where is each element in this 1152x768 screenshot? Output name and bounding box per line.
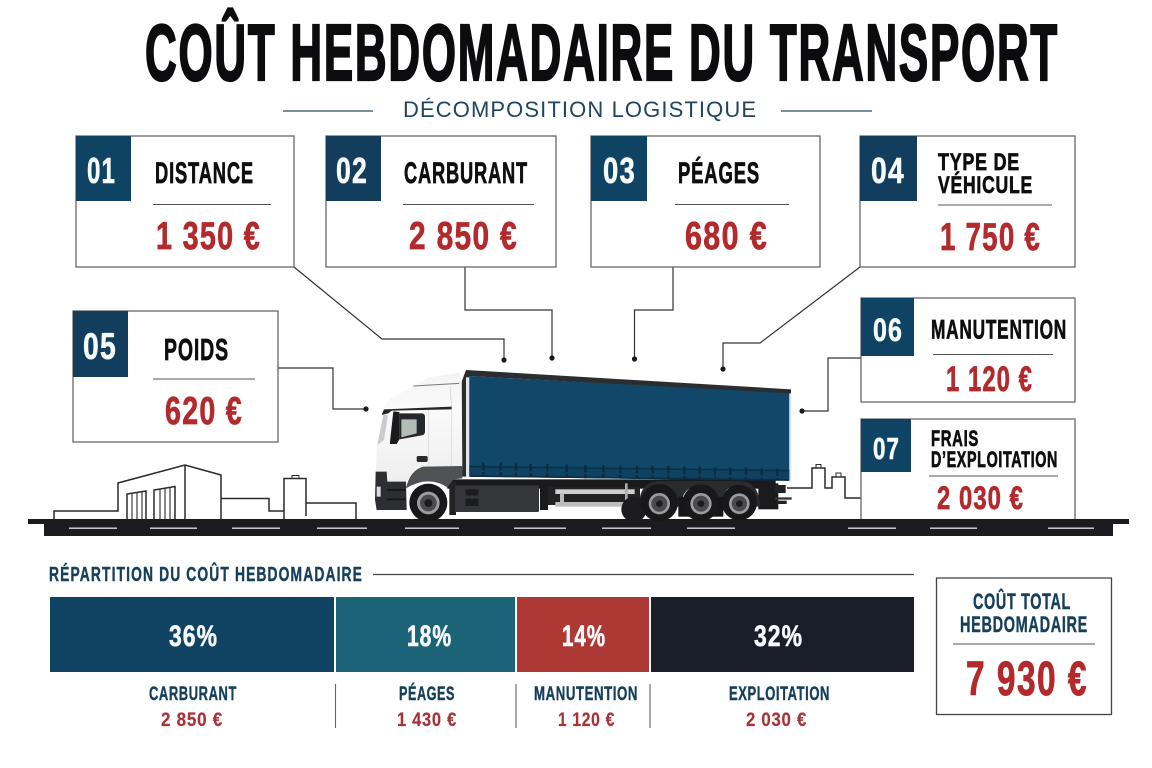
truck cab [375, 373, 462, 510]
card 07 frais d'exploitation [861, 419, 1075, 519]
card 03 peages: 03 [603, 150, 636, 191]
segment exploitation 32%: 32% [754, 620, 803, 653]
label carburant: 2 850 € [161, 710, 223, 731]
truck [375, 370, 792, 522]
label manutention: 1 120 € [558, 710, 615, 731]
bar labels [149, 683, 830, 731]
card 05 poids: POIDS [164, 332, 229, 367]
card 06 manutention: 1 120 € [946, 360, 1033, 399]
skyline right [787, 464, 861, 498]
subtitle: DÉCOMPOSITION LOGISTIQUE [403, 97, 756, 122]
card 05 poids [73, 311, 278, 442]
card 07 frais d'exploitation: 2 030 € [937, 480, 1024, 516]
card 02 carburant: 02 [336, 150, 368, 191]
card 05 poids: 05 [83, 326, 117, 367]
card 05 poids: 620 € [165, 390, 243, 433]
card 04 type de vehicule: 04 [871, 150, 905, 191]
label exploitation [729, 684, 830, 731]
skyline left [54, 465, 356, 519]
truck wheels [409, 481, 760, 522]
total cost box: 7 930 € [966, 653, 1088, 706]
road [28, 519, 1129, 536]
label exploitation: 2 030 € [746, 710, 807, 731]
card 07 frais d'exploitation: D’EXPLOITATION [931, 447, 1058, 472]
card 01 distance: DISTANCE [155, 157, 254, 190]
card 04 type de vehicule: 1 750 € [940, 216, 1041, 259]
card 04 type de vehicule [860, 136, 1075, 267]
label peages: 1 430 € [397, 710, 457, 731]
stacked bar [50, 597, 914, 672]
total cost box [936, 578, 1112, 714]
total cost box: HEBDOMADAIRE [960, 612, 1088, 637]
card 02 carburant: CARBURANT [404, 157, 528, 190]
label manutention: MANUTENTION [534, 684, 638, 705]
label exploitation: EXPLOITATION [729, 684, 830, 705]
card 06 manutention: MANUTENTION [931, 314, 1067, 344]
truck trailer [462, 370, 791, 482]
truck chassis [447, 479, 792, 515]
segment manutention 14%: 14% [562, 620, 606, 653]
label carburant [149, 684, 237, 731]
label peages [397, 683, 457, 731]
segment carburant 36% [50, 597, 334, 672]
card 01 distance: 1 350 € [156, 215, 261, 258]
card 01 distance [76, 136, 294, 267]
segment carburant 36%: 36% [169, 620, 218, 653]
card 06 manutention: 06 [873, 312, 903, 348]
total cost box: COÛT TOTAL [973, 589, 1071, 614]
card 04 type de vehicule: VÉHICULE [938, 171, 1033, 199]
segment peages 18%: 18% [407, 620, 452, 653]
card 07 frais d'exploitation: 07 [873, 431, 900, 466]
connector lines [278, 267, 861, 414]
card 03 peages [591, 136, 820, 267]
card 04 type de vehicule: TYPE DE [938, 149, 1020, 176]
card 01 distance: 01 [87, 150, 116, 191]
card 03 peages: 680 € [685, 215, 768, 258]
label carburant: CARBURANT [149, 684, 237, 705]
card 07 frais d'exploitation: FRAIS [931, 426, 979, 451]
segment exploitation 32% [651, 597, 914, 672]
card 06 manutention [861, 298, 1075, 402]
card 02 carburant: 2 850 € [409, 215, 518, 258]
breakdown heading: RÉPARTITION DU COÛT HEBDOMADAIRE [49, 562, 363, 586]
card 03 peages: PÉAGES [678, 156, 760, 190]
card 02 carburant [326, 136, 556, 267]
segment peages 18% [336, 597, 515, 672]
label manutention [534, 684, 638, 731]
label peages: PÉAGES [399, 683, 455, 705]
segment manutention 14% [517, 597, 649, 672]
